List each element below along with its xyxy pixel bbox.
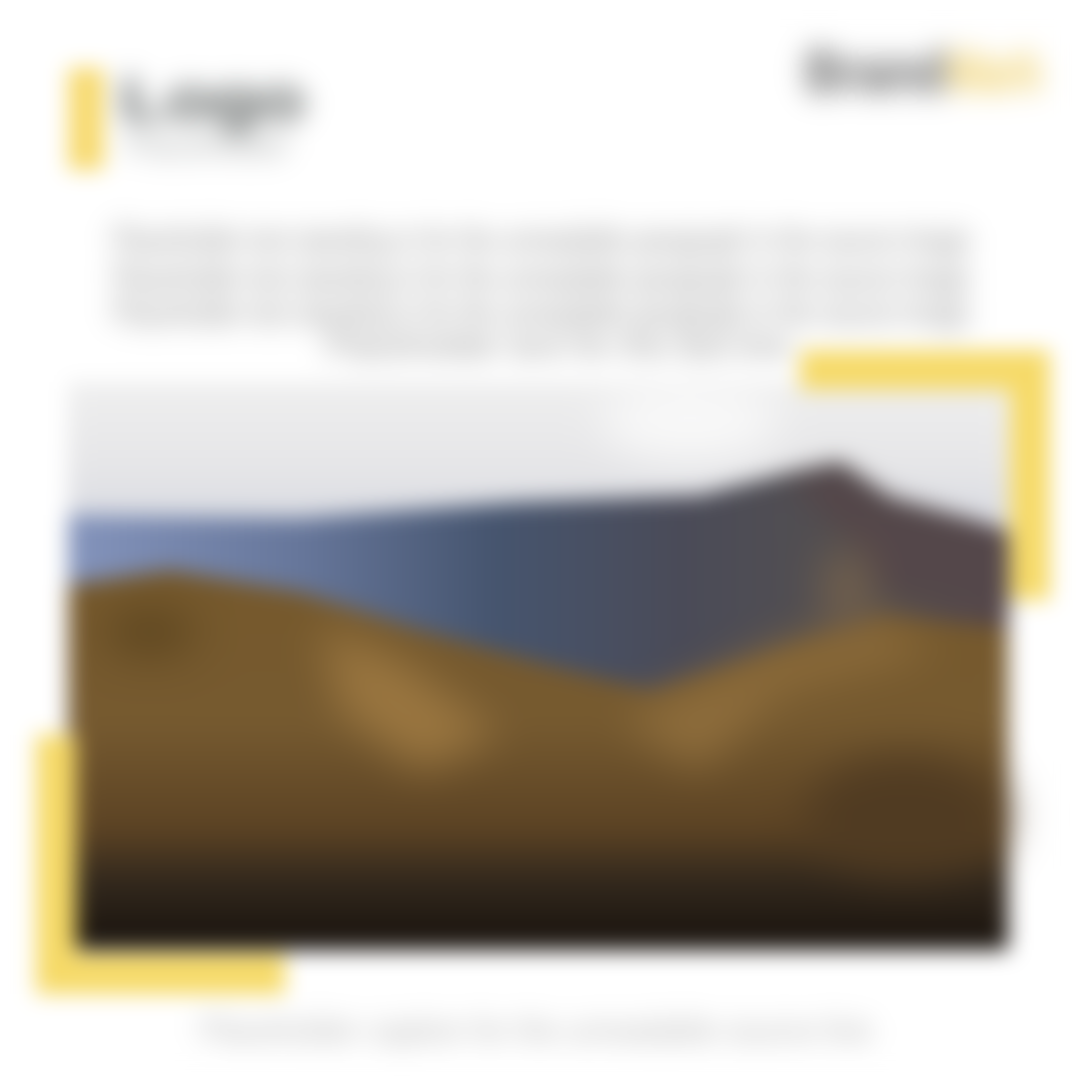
intro paragraph bbox=[112, 219, 970, 367]
landscape photograph bbox=[68, 380, 1008, 950]
header label: Brand bbox=[805, 38, 947, 105]
right shadow bbox=[805, 755, 1005, 875]
logo wordmark: Logo bbox=[120, 66, 305, 133]
rocky ridge bbox=[825, 545, 870, 630]
sky bbox=[68, 382, 1008, 522]
logo wordmark bbox=[120, 66, 305, 163]
shadow patch bbox=[104, 608, 196, 656]
distant mountain range bbox=[68, 462, 1008, 720]
yellow corner frame: bottom left bbox=[56, 735, 285, 974]
caption: Placeholder caption for the unreadable source line bbox=[200, 1009, 872, 1050]
logo accent bar bbox=[68, 68, 104, 170]
right hill highlight bbox=[620, 622, 940, 770]
golden foreground hills bbox=[68, 570, 1008, 950]
logo wordmark: Placeholder bbox=[125, 130, 290, 163]
yellow corner frame: top right bbox=[800, 370, 1030, 600]
intro paragraph: Placeholder text for the last line bbox=[325, 325, 790, 367]
hill highlight bbox=[320, 625, 500, 770]
cloud highlight bbox=[600, 380, 780, 460]
dark mountain slope bbox=[790, 468, 1008, 600]
